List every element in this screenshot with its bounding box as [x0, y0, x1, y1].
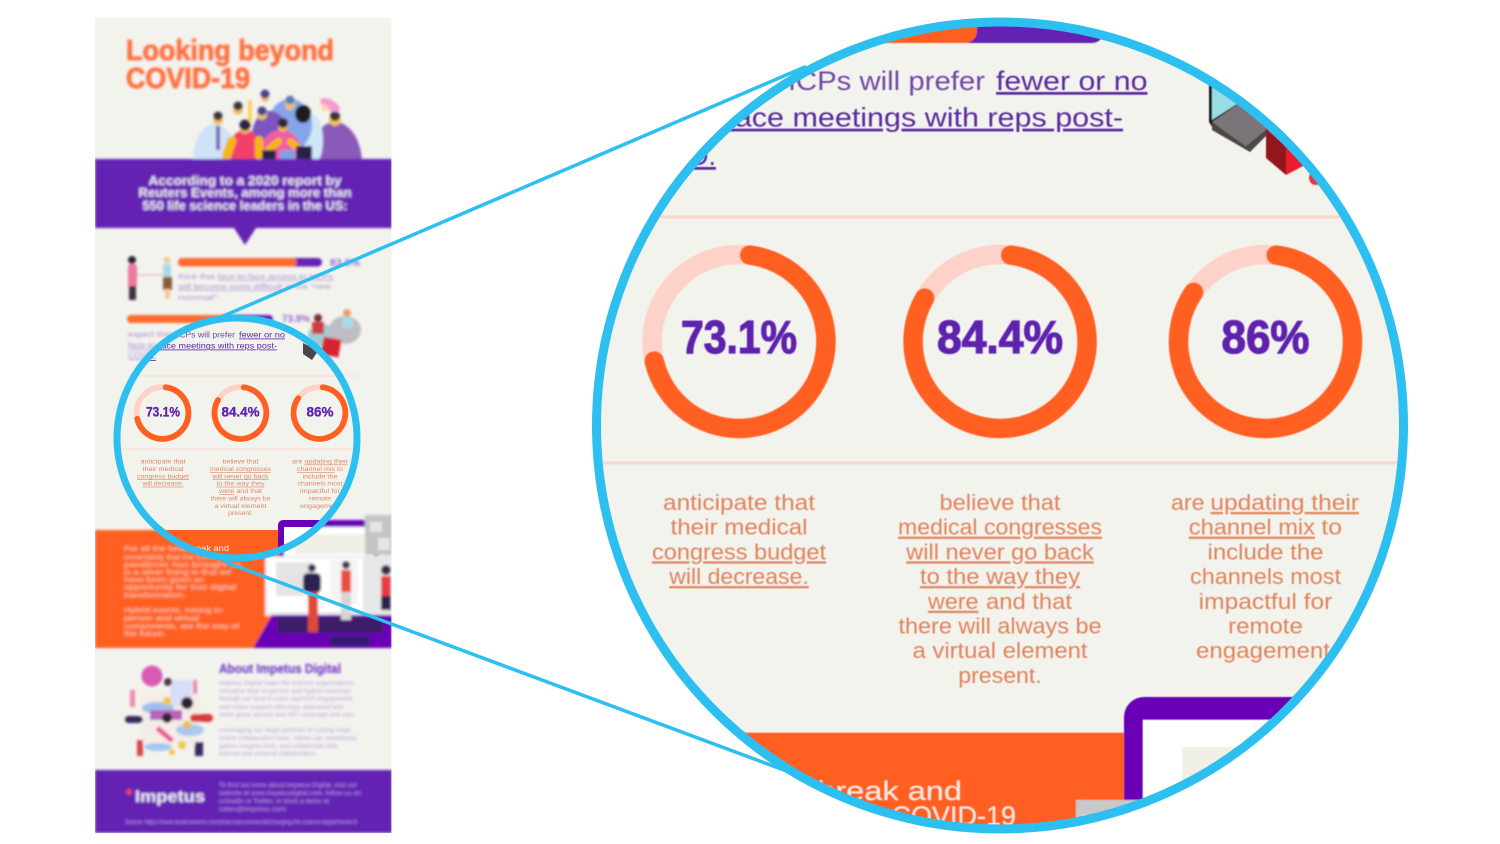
text: about body: gather insights from, and collaborate with,: [219, 743, 339, 750]
panel: full infographic thumbnail: [95, 18, 392, 833]
donut: 73.1%: 73.1%: [681, 311, 797, 363]
text: prefer fewer meetings, small: face-to-face meetings with reps post-: [128, 342, 277, 350]
text: small captions: congress budget: [137, 473, 189, 480]
icon: laptop in small lens: [303, 343, 317, 360]
text: small captions: include the: [302, 473, 338, 480]
donut: small 84.4%: [215, 387, 266, 439]
title: [126, 35, 334, 95]
text: fewer meetings, thumbnail edges: expect that HCPs will prefer fewer or no: [128, 330, 286, 339]
illustration: virtual event stage: [253, 515, 392, 648]
stat bar: 83.5%: 83.5%: [330, 258, 360, 269]
text: small captions: anticipate that: [140, 458, 186, 466]
panel: orange transformation: uncertainty that the COVID-19: [124, 552, 234, 562]
banner: purple intro: 550 life science leaders in the US:: [142, 199, 348, 213]
donut: 84.4%: [913, 254, 1087, 428]
donut: small 73.1%: [137, 387, 188, 439]
text: small captions: remote: [309, 496, 331, 502]
stat bar: 73.9%: [127, 314, 310, 325]
text: caption 73.1%: will decrease.: [668, 564, 809, 589]
text: prefer fewer meetings, small: COVID.: [128, 352, 156, 361]
donut: 73.1%: [652, 254, 826, 428]
text: about body: online collaboration tools, clients can seamlessly: [219, 735, 358, 742]
donut: small 73.1%: 73.1%: [146, 404, 180, 420]
illustration: collaboration collage: [125, 666, 213, 756]
panel: orange transformation: transformation.: [124, 590, 186, 600]
panel: zoomed orange: outbreak and: [772, 776, 962, 806]
text: about body: Impetus Digital helps life science organizations: [219, 680, 355, 687]
lens ring: small: [117, 318, 357, 558]
text: small captions: [137, 458, 349, 517]
text: caption 86%: channel mix: [1189, 515, 1315, 540]
text: caption 84.4%: a virtual element: [912, 638, 1088, 663]
text: zoomed prefer fewer meetings: expect that HCPs will prefer: [623, 66, 985, 96]
panel: orange transformation: Hybrid events, mixing in-: [124, 606, 225, 614]
orange panel inside small lens: eak and: [196, 544, 229, 553]
logo: Impetus: Impetus: [135, 787, 205, 806]
text: caption 86%: are: [1171, 490, 1204, 515]
text: face-to-face access: normal": [178, 295, 219, 302]
icon: people at computers: [303, 309, 361, 357]
text: caption 84.4%: to the way they: [920, 564, 1080, 589]
panel: footer: sales@impetus.com: [219, 806, 286, 813]
text: caption 84.4%: medical congresses: [898, 515, 1102, 540]
panel: footer: [95, 770, 392, 833]
text: small captions: channel mix to: [297, 466, 343, 473]
illustration: group of people: [190, 88, 364, 162]
orange panel inside small lens: [166, 520, 320, 554]
text: caption 86%: [1171, 490, 1359, 663]
text: caption 73.1%: anticipate that: [663, 490, 815, 515]
text: caption 84.4%: will never go back: [905, 539, 1095, 564]
panel: orange transformation: components, are the way of: [124, 622, 240, 630]
panel: footer: To find out more about Impetus Digital, visit our: [219, 782, 358, 789]
banner: purple intro: [95, 159, 392, 245]
dividers: [359, 376, 360, 377]
text: about body: [218, 680, 358, 758]
text: small captions: were and that: [218, 488, 262, 495]
banner: purple intro: According to a 2020 report by: [148, 174, 342, 188]
text: face-to-face access: [177, 274, 334, 302]
icon: zoomed laptop and red block: [1209, 80, 1323, 185]
text: caption 86%: remote: [1228, 614, 1303, 638]
text: small captions: present.: [228, 510, 253, 517]
heading: about: About Impetus Digital: [219, 661, 341, 676]
text: caption 84.4%: believe that: [940, 490, 1060, 515]
text: zoomed prefer fewer meetings: [693, 70, 1148, 170]
panel: orange transformation: person and virtual: [124, 614, 199, 622]
text: fewer meetings, thumbnail edges: face-to-face meetings with reps post-: [128, 341, 277, 350]
illustration: zoomed laptop frame: [1075, 696, 1293, 818]
panel: orange transformation: the future.: [124, 629, 166, 638]
text: small captions: are updating their: [292, 458, 349, 466]
panel: orange transformation: is a silver lining in that we: [124, 568, 232, 576]
text: about body: white-glove service and 24/7 coverage and care.: [218, 712, 356, 718]
panel: footer: website at www.impetusdigital.com, follow us on: [218, 790, 361, 797]
text: small captions: impactful for: [300, 488, 341, 495]
text: about body: virtualize their in-person and hybrid meetings: [219, 688, 352, 695]
text: small captions: will decrease.: [141, 481, 184, 488]
text: prefer fewer meetings, small: fewer or no: [239, 330, 286, 340]
text: about body: Leveraging our large portfolio of cutting-edge: [219, 727, 351, 734]
text: fewer meetings, thumbnail edges: COVID.: [128, 351, 156, 360]
connector line: lower: [225, 562, 800, 776]
panel: zoomed orange: that the COVID-19: [794, 801, 1016, 831]
text: caption 86%: to: [1321, 515, 1342, 540]
text: caption 73.1%: congress budget: [652, 539, 826, 564]
text: prefer fewer meetings, small: [150, 332, 285, 361]
text: small captions: believe that: [222, 458, 259, 466]
panel: orange transformation: opportunity for true digital: [124, 582, 236, 592]
text: prefer fewer meetings, small: expect that HCPs will prefer: [128, 330, 235, 340]
text: small captions: engagement: [300, 503, 340, 510]
text: small captions: channels most: [298, 481, 343, 488]
panel: footer: Source: https://www.reutersevents.com/pharma/commercial/changing-life-science-departments-5: [125, 819, 357, 826]
donut: 84.4%: 84.4%: [937, 311, 1063, 363]
text: face-to-face access: will become more difficult in the "new: [177, 284, 332, 291]
text: caption 73.1%: their medical: [670, 515, 808, 540]
panel: orange transformation: pandemic has brought us,: [124, 560, 244, 569]
text: about body: and video support offerings, delivered with: [219, 704, 344, 711]
text: caption 86%: include the: [1208, 539, 1324, 564]
stat bar: 73.9%: 73.9%: [282, 314, 310, 325]
lens ring: large: [596, 22, 1404, 829]
stat bar inside small lens: [127, 314, 273, 320]
donut: small 84.4%: 84.4%: [222, 404, 260, 420]
title: COVID-19: [126, 63, 250, 95]
text: small captions: will never go back: [211, 473, 269, 480]
text: caption 86%: updating their: [1210, 490, 1359, 515]
icon: two people distanced: [128, 256, 172, 300]
donut: small 86%: [294, 387, 345, 439]
title: Looking beyond: [126, 35, 334, 67]
text: caption 86%: engagement: [1196, 638, 1330, 663]
panel: zoomed orange: [590, 733, 1124, 843]
text: face-to-face access: think that face-to-face access to HCPs: [178, 274, 334, 281]
panel: footer: LinkedIn or Twitter, or book a demo at: [219, 798, 329, 805]
text: caption 86%: impactful for: [1199, 589, 1332, 614]
text: zoomed prefer fewer meetings: fewer or no: [996, 66, 1148, 96]
connector line: upper: [186, 66, 806, 332]
donut: small 86%: 86%: [306, 404, 334, 420]
donut: 86%: 86%: [1222, 311, 1310, 363]
magnifier: small circle detail: [114, 314, 360, 562]
text: caption 84.4%: and that: [986, 589, 1072, 614]
text: caption 86%: channels most: [1190, 564, 1341, 589]
text: zoomed prefer fewer meetings: face-to-face meetings with reps post-: [623, 103, 1123, 133]
text: small captions: a virtual element: [214, 503, 267, 510]
panel: orange transformation: [95, 530, 278, 648]
banner: purple intro: Reuters Events, among more than: [138, 186, 352, 200]
panel: orange transformation: have been given an: [124, 575, 204, 584]
text: caption 84.4%: [898, 490, 1102, 688]
text: small captions: medical congresses: [210, 466, 271, 473]
text: small captions: their medical: [142, 466, 184, 473]
text: fewer meetings, thumbnail edges: [127, 330, 176, 362]
text: about body: through our best-in-class rep/HCP engagement: [219, 696, 352, 702]
stat bar: zoomed purple and orange: [884, 26, 1102, 44]
stat bar: 83.5%: [178, 258, 360, 269]
donut: 86%: [1178, 254, 1352, 428]
text: caption 84.4%: present.: [958, 663, 1042, 688]
magnifier: large circle detail: [590, 10, 1444, 844]
text: caption 84.4%: there will always be: [898, 614, 1102, 638]
text: small captions: to the way they: [216, 481, 265, 488]
panel: orange transformation: For all the heartbreak and: [124, 544, 231, 553]
text: small captions: there will always be: [210, 496, 271, 502]
text: caption 73.1%: [652, 490, 826, 589]
text: caption 84.4%: were: [927, 589, 978, 614]
text: about body: internal and external stakeholders.: [219, 750, 317, 758]
text: zoomed prefer fewer meetings: COVID.: [623, 141, 716, 171]
